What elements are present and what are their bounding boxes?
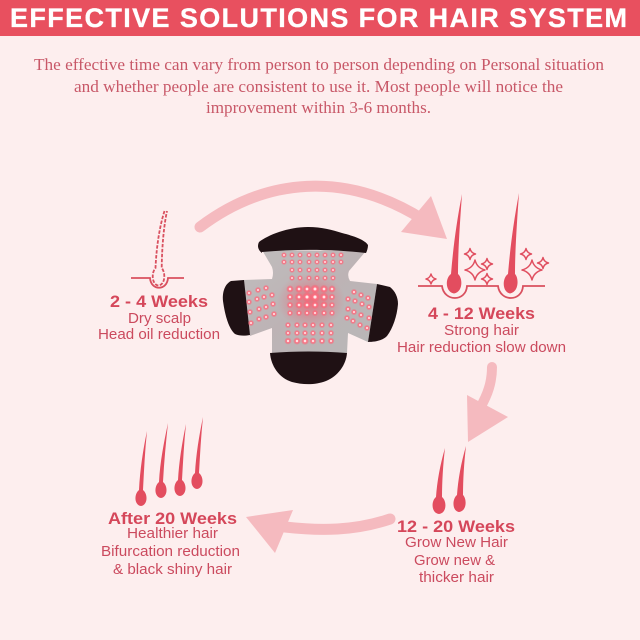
icon: four healthy hairs [135,417,203,506]
device bottom cap [270,352,347,384]
label: 4-12 weeks [397,304,566,356]
intro paragraph: The effective time can vary from person to person depending on Personal situation [34,55,604,74]
LED dots [246,252,372,345]
icon: dashed hair outline [131,211,184,288]
device top cap [258,227,368,253]
label: after 20 weeks: Healthier hair [127,526,218,542]
label: 12-20 weeks: thicker hair [419,570,494,586]
label: 4-12 weeks: Hair reduction slow down [397,340,566,356]
label: 2-4 weeks: 2 - 4 Weeks [110,292,208,311]
label: 2-4 weeks: Dry scalp [128,311,191,327]
label: 12-20 weeks [397,517,515,586]
label: after 20 weeks: Bifurcation reduction [101,544,240,560]
intro paragraph: improvement within 3-6 months. [206,98,431,117]
label: 12-20 weeks: 12 - 20 Weeks [397,517,515,536]
arrow: 12-20 weeks to after 20 weeks [246,510,390,553]
label: 12-20 weeks: Grow New Hair [405,535,508,551]
label: 12-20 weeks: Grow new & [414,553,495,569]
arrow: 4-12 weeks to 12-20 weeks [467,367,508,442]
label: after 20 weeks [101,509,240,578]
device: red light therapy cap [223,227,398,384]
icon: two new hairs [433,446,466,514]
title banner: EFFECTIVE SOLUTIONS FOR HAIR SYSTEM [10,3,627,33]
device right pad [368,284,398,342]
label: after 20 weeks: After 20 Weeks [108,509,237,528]
intro paragraph: and whether people are consistent to use it. Most people will notice the [74,77,563,96]
intro paragraph [34,55,604,117]
label: 4-12 weeks: Strong hair [444,323,519,339]
icon: two strong hairs with sparkles [418,193,548,298]
stage: 2-4 weeks [98,211,220,343]
label: 2-4 weeks [98,292,220,343]
stage: 4-12 weeks [397,193,566,356]
arrow: 2-4 weeks to 4-12 weeks [200,186,447,239]
device left pad [223,280,250,336]
label: after 20 weeks: & black shiny hair [113,562,232,578]
central red glow [277,273,345,329]
device mesh body [243,250,377,353]
stage: after 20 weeks [101,417,240,578]
stage: 12-20 weeks [397,446,515,586]
label: 2-4 weeks: Head oil reduction [98,327,220,343]
label: 4-12 weeks: 4 - 12 Weeks [428,304,535,323]
